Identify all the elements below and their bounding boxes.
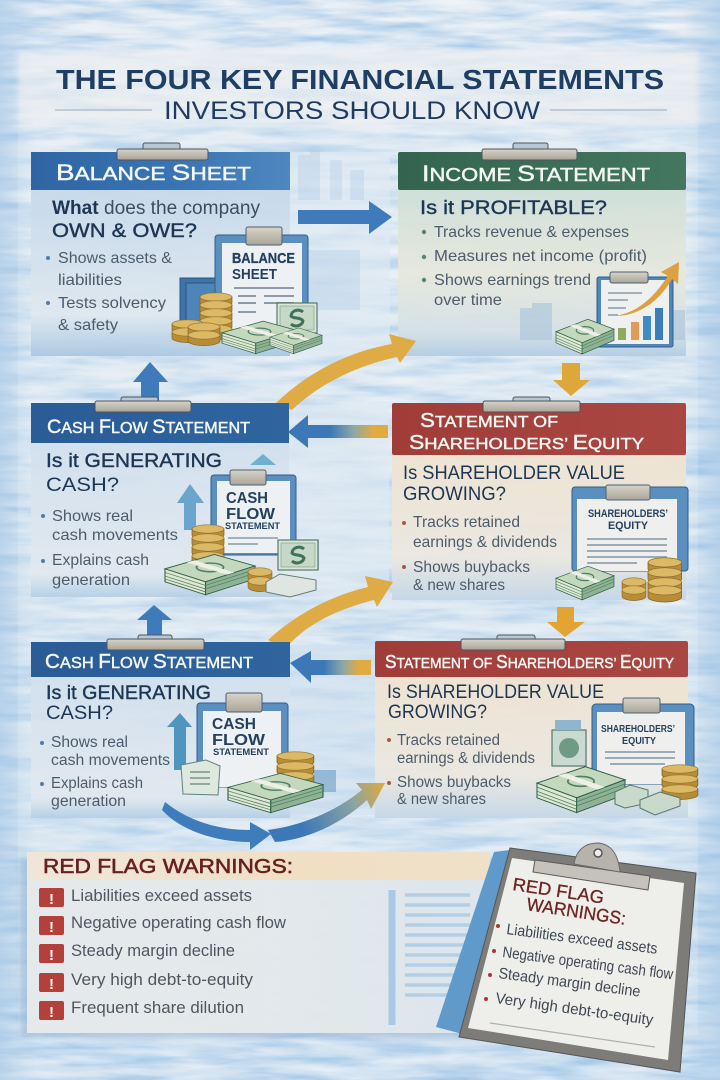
illustration: balance sheet clipboard, coins and cash: SHEET	[232, 266, 277, 283]
question: What does the company	[52, 198, 260, 219]
bullets	[402, 514, 557, 594]
illustration: equity clipboard lower: SHAREHOLDERS’	[601, 724, 675, 735]
bullets	[387, 732, 535, 808]
warning: debt: !	[49, 976, 54, 993]
clip	[461, 635, 565, 650]
illustration: balance sheet clipboard, coins and cash	[172, 227, 322, 354]
panel: cash flow statement lower: CASH?	[46, 703, 113, 724]
bullets	[41, 508, 178, 589]
clipboard heading: WARNINGS:	[525, 894, 627, 929]
title: THE FOUR KEY FINANCIAL STATEMENTS	[56, 64, 664, 95]
arrow: gold down to equity lower	[547, 607, 585, 637]
bullets: Tracks revenue & expenses	[434, 224, 629, 241]
panel: shareholders equity top	[392, 397, 688, 602]
bullets	[46, 250, 172, 334]
question: Is it GENERATING	[46, 683, 211, 704]
heading: INCOME STATEMENT	[422, 161, 650, 186]
warning: liabilities: Liabilities exceed assets	[71, 887, 252, 905]
illustration: equity clipboard top: EQUITY	[608, 520, 649, 532]
bullets: Explains cash	[51, 775, 143, 792]
heading: CASH FLOW STATEMENT	[47, 417, 251, 438]
illustration: income clipboard with chart	[520, 262, 685, 354]
bullets: & new shares	[397, 791, 486, 808]
warning: margin: Steady margin decline	[71, 942, 235, 960]
arrow: blue to gold curve to equity lower	[268, 783, 385, 842]
arrow: gold curve to equity top	[268, 576, 393, 650]
bullets	[40, 734, 170, 810]
clipboard list	[484, 921, 675, 1029]
bullets: earnings & dividends	[413, 534, 557, 551]
panel: income statement	[398, 143, 686, 356]
question: Is SHAREHOLDER VALUE	[403, 463, 625, 484]
bullets: Measures net income (profit)	[434, 248, 647, 265]
illustration: cash flow clipboard top: CASH	[226, 490, 268, 507]
bullets: Shows earnings trend	[434, 272, 591, 289]
clip	[95, 397, 191, 412]
heading: CASH FLOW STATEMENT	[45, 651, 253, 673]
warning: dilution	[39, 999, 244, 1021]
bullets: cash movements	[51, 752, 170, 769]
bullets: & new shares	[413, 577, 505, 594]
warning: cash flow: !	[49, 919, 54, 936]
panel: shareholders equity lower	[375, 635, 698, 818]
warning: debt	[39, 971, 254, 993]
panel: balance sheet: OWN & OWE?	[52, 221, 197, 242]
bullets: cash movements	[52, 527, 178, 544]
warning list	[39, 887, 286, 1021]
clipboard: red flag warnings	[436, 843, 696, 1072]
bullets: liabilities	[58, 272, 122, 289]
clip	[482, 143, 577, 160]
bullets: Shows real	[51, 734, 128, 751]
warning: dilution: Frequent share dilution	[71, 999, 244, 1017]
bullets: Shows real	[52, 508, 133, 525]
illustration: equity clipboard top: SHAREHOLDERS’	[588, 508, 668, 520]
clip	[533, 843, 650, 890]
bullets: Tests solvency	[58, 295, 166, 312]
heading: BALANCE SHEET	[56, 160, 251, 185]
illustration: equity clipboard lower: EQUITY	[622, 736, 656, 747]
arrow: blue up to balance sheet	[133, 362, 168, 403]
illustration: cash flow clipboard lower: CASH	[212, 716, 256, 733]
heading: STATEMENT OF SHAREHOLDERS’ EQUITY	[385, 652, 674, 672]
heading: SHAREHOLDERS’ EQUITY	[409, 432, 644, 454]
bullets: Shows assets &	[58, 250, 172, 267]
illustration: cash flow clipboard lower: FLOW	[212, 732, 266, 749]
bullets: & safety	[58, 317, 118, 334]
arrow: equity to cash flow lower	[290, 651, 371, 683]
panel: cash flow statement top	[31, 397, 319, 597]
heading: RED FLAG WARNINGS:	[43, 856, 293, 878]
arrow: balance to income	[298, 201, 392, 234]
bullets: earnings & dividends	[397, 750, 535, 767]
arrow: blue curve along bottom	[162, 802, 271, 850]
bullets: Shows buybacks	[413, 559, 530, 576]
bullets: Tracks retained	[397, 732, 500, 749]
clipboard list: Liabilities exceed assets	[505, 921, 659, 958]
illustration: cash flow clipboard top	[165, 454, 319, 597]
subtitle: INVESTORS SHOULD KNOW	[164, 97, 540, 125]
clipboard list: Steady margin decline	[497, 965, 641, 1001]
illustration: equity clipboard lower	[537, 698, 698, 815]
bullets: generation	[52, 572, 130, 589]
panel: shareholders equity top: GROWING?	[403, 484, 506, 505]
title	[55, 64, 667, 125]
illustration: balance sheet clipboard, coins and cash: BALANCE	[232, 250, 295, 267]
question: Is SHAREHOLDER VALUE	[387, 682, 604, 703]
question: Is it GENERATING	[46, 451, 222, 472]
warning: dilution: !	[49, 1004, 54, 1021]
panel: red flag warnings	[20, 852, 490, 1038]
illustration: cash flow clipboard lower	[167, 693, 336, 813]
clip	[107, 635, 204, 650]
question: Is it PROFITABLE?	[420, 198, 607, 219]
bullets: generation	[51, 793, 126, 810]
panel: balance sheet	[31, 143, 322, 356]
clipboard list: Negative operating cash flow	[501, 944, 675, 984]
bullets: Tracks retained	[413, 514, 520, 531]
bullets: Shows buybacks	[397, 774, 511, 791]
clip	[117, 143, 208, 160]
bullets: Explains cash	[52, 552, 149, 569]
clip	[483, 397, 580, 412]
arrow: equity to cash flow top	[288, 415, 388, 448]
clipboard heading: RED FLAG	[511, 874, 605, 908]
heading: STATEMENT OF	[420, 410, 558, 432]
panel: cash flow statement top: CASH?	[46, 475, 119, 496]
bullets: over time	[434, 292, 502, 309]
arrow: blue up to cash flow top	[137, 605, 172, 642]
illustration: equity clipboard top	[556, 485, 688, 602]
warning: margin: !	[49, 947, 54, 964]
illustration: cash flow clipboard lower: STATEMENT	[213, 747, 270, 757]
warning: liabilities: !	[49, 891, 54, 908]
heading	[409, 410, 644, 454]
illustration: cash flow clipboard top: STATEMENT	[225, 521, 281, 531]
panel: shareholders equity lower: GROWING?	[388, 702, 487, 723]
illustration: cash flow clipboard top: FLOW	[226, 506, 276, 523]
clipboard heading	[511, 874, 627, 929]
warning: debt: Very high debt-to-equity	[71, 971, 254, 989]
warning: margin	[39, 942, 235, 964]
panel: cash flow statement lower	[31, 635, 336, 818]
clipboard list: Very high debt-to-equity	[494, 990, 654, 1029]
arrow: gold down to equity	[553, 363, 590, 396]
arrow: gold curve to income	[276, 334, 416, 410]
bullets	[422, 224, 647, 309]
warning: cash flow: Negative operating cash flow	[71, 914, 286, 932]
